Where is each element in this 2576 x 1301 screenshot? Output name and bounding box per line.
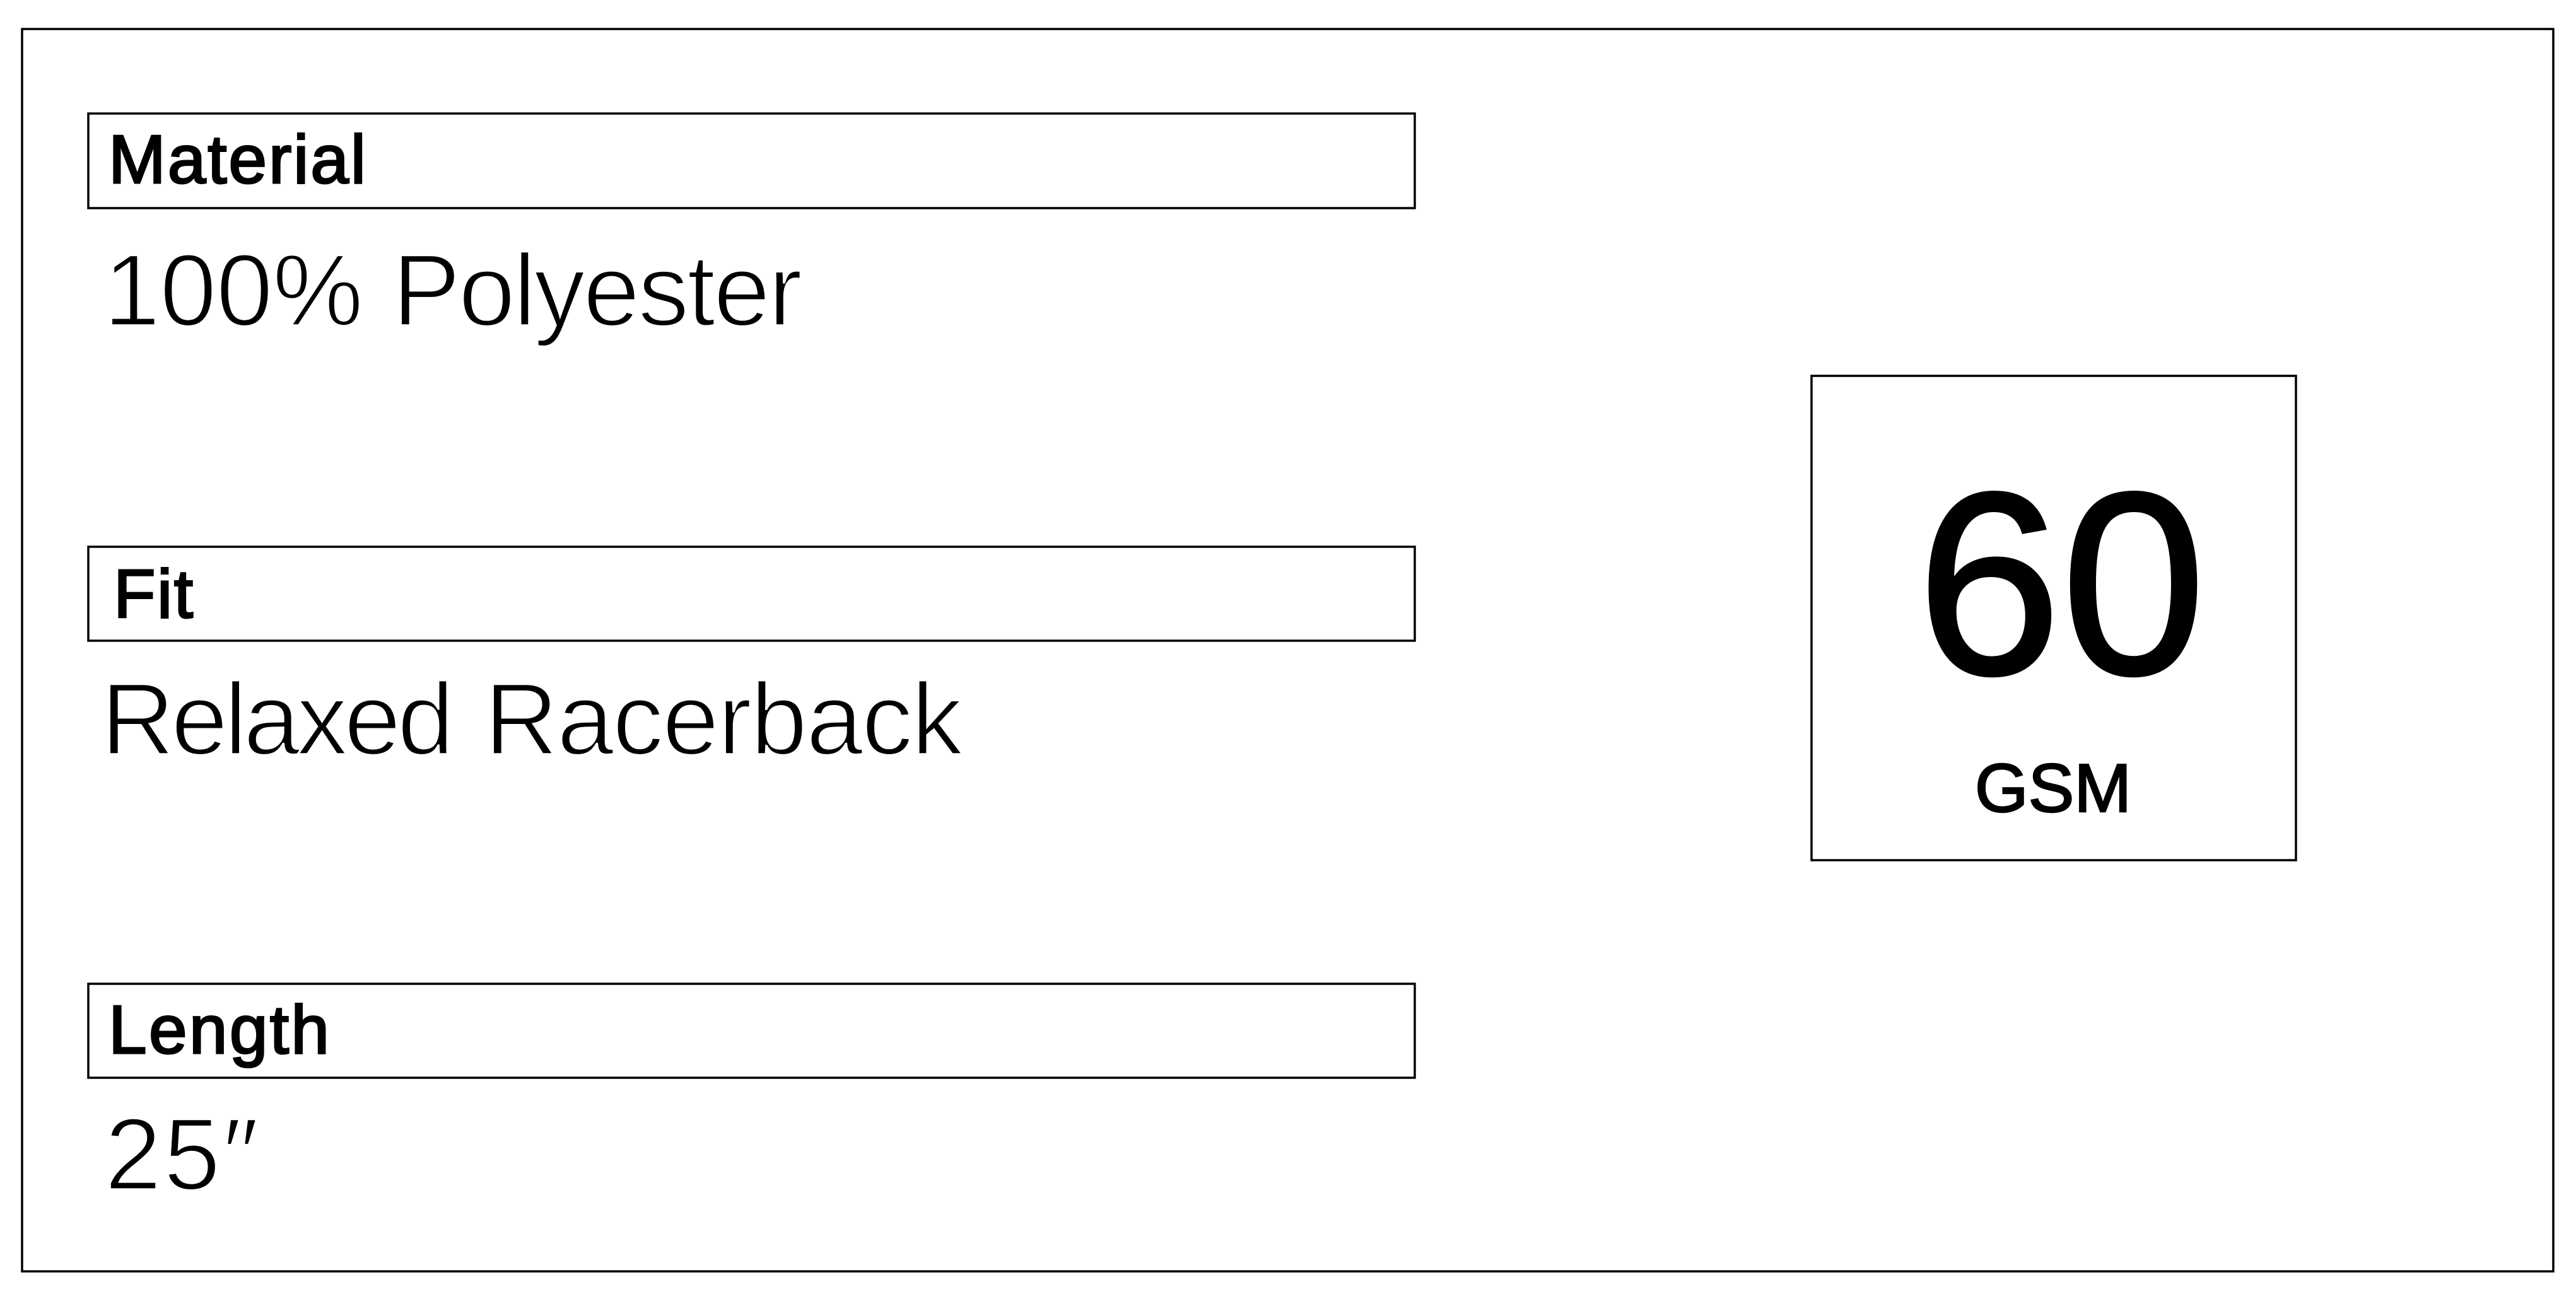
material label box (88, 114, 1415, 208)
panel: GSM badge (1812, 376, 2296, 860)
material heading: Material (108, 121, 366, 198)
material value (103, 233, 802, 347)
length heading: Length (108, 991, 329, 1068)
length label box (88, 984, 1415, 1078)
panel: fit (88, 547, 1415, 776)
panel: length (88, 984, 1415, 1211)
GSM box (1812, 376, 2296, 860)
material value: 100% (103, 233, 363, 347)
material value: Polyester (392, 233, 802, 347)
length value: 25″ (105, 1097, 259, 1211)
panel: material (88, 114, 1415, 347)
GSM number: 60 (1917, 439, 2206, 729)
fit value (101, 662, 963, 776)
GSM unit: GSM (1975, 750, 2131, 827)
fit label box (88, 547, 1415, 641)
fit value: Relaxed (101, 662, 454, 776)
fit heading: Fit (114, 556, 193, 633)
fit value: Racerback (484, 662, 963, 776)
